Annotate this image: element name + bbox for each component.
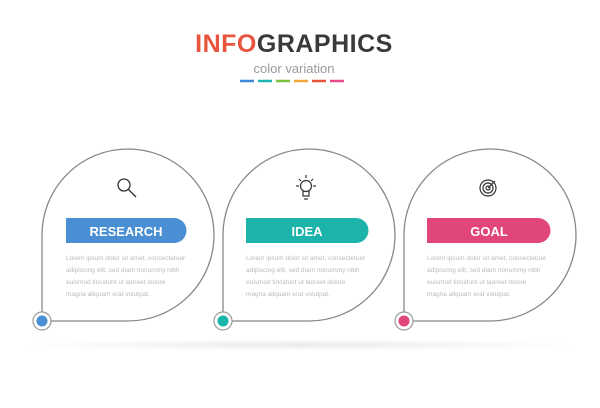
- subtitle: color variation: [254, 61, 334, 76]
- text block: [246, 255, 366, 298]
- label pill: research: [66, 218, 186, 243]
- panel: idea: [214, 149, 395, 330]
- text block: [427, 255, 547, 298]
- dot: [395, 312, 413, 330]
- text block: euismod tincidunt ut laoreet dolore: [246, 279, 346, 286]
- label pill: goal: GOAL: [470, 224, 508, 239]
- label pill: goal: [427, 218, 550, 243]
- text block: Lorem ipsum dolor sit amet, consectetuer: [66, 255, 186, 262]
- panel: research: [33, 149, 214, 330]
- text block: adipiscing elit, sed diam nonummy nibh: [246, 267, 360, 274]
- label pill: idea: [246, 218, 368, 243]
- title: INFOGRAPHICS: [195, 30, 393, 58]
- text block: euismod tincidunt ut laoreet dolore: [66, 279, 166, 286]
- icon: magnifier: [118, 179, 136, 197]
- text block: adipiscing elit, sed diam nonummy nibh: [427, 267, 541, 274]
- label pill: idea: IDEA: [291, 224, 323, 239]
- icon: target: [480, 180, 496, 196]
- text block: magna aliquam erat volutpat.: [427, 291, 511, 298]
- text block: magna aliquam erat volutpat.: [246, 291, 330, 298]
- panel: goal: [395, 149, 576, 330]
- icon: bulb: [296, 175, 316, 199]
- text block: adipiscing elit, sed diam nonummy nibh: [66, 267, 180, 274]
- text block: magna aliquam erat volutpat.: [66, 291, 150, 298]
- dot: [214, 312, 232, 330]
- text block: Lorem ipsum dolor sit amet, consectetuer: [246, 255, 366, 262]
- text block: euismod tincidunt ut laoreet dolore: [427, 279, 527, 286]
- text block: [66, 255, 186, 298]
- text block: Lorem ipsum dolor sit amet, consectetuer: [427, 255, 547, 262]
- label pill: research: RESEARCH: [90, 224, 162, 239]
- dot: [33, 312, 51, 330]
